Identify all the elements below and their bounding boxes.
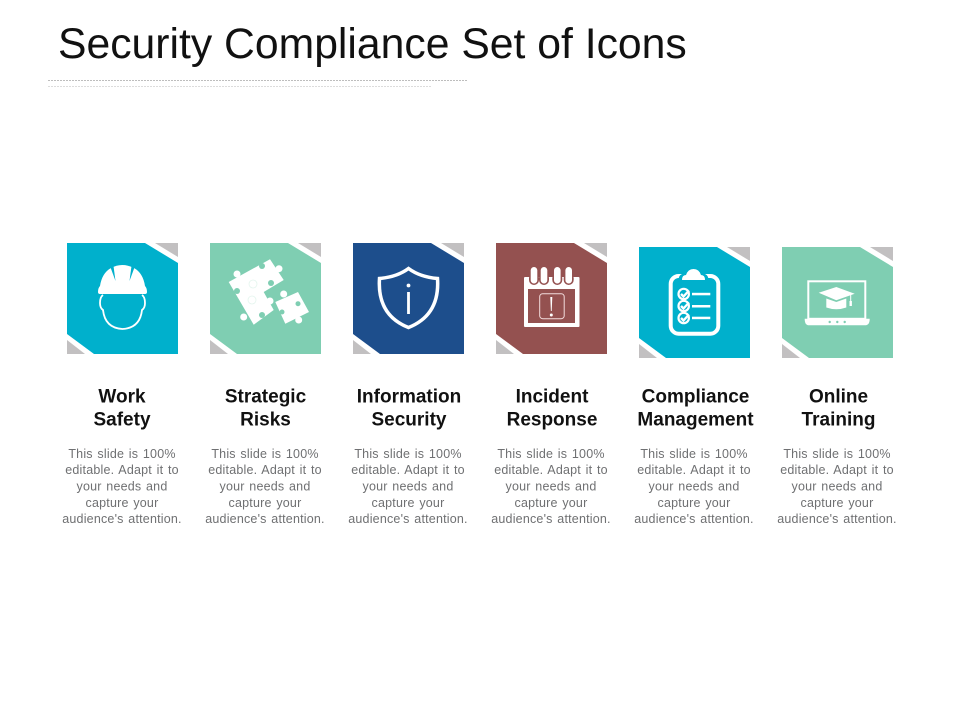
description: audience's attention.	[62, 512, 182, 526]
description: capture your	[229, 496, 301, 510]
panel: online training	[777, 247, 897, 526]
description: This slide is 100%	[640, 447, 748, 461]
description: editable. Adapt it to	[208, 463, 322, 477]
description: editable. Adapt it to	[780, 463, 894, 477]
description: capture your	[372, 496, 444, 510]
description: This slide is 100%	[497, 447, 605, 461]
description: editable. Adapt it to	[494, 463, 608, 477]
heading: Training	[802, 410, 875, 430]
description: editable. Adapt it to	[65, 463, 179, 477]
icon: clipboard checklist	[639, 247, 750, 358]
heading: Information	[357, 386, 461, 408]
description: audience's attention.	[348, 512, 468, 526]
icon: laptop with graduation cap	[782, 247, 893, 358]
description: audience's attention.	[634, 512, 754, 526]
description: capture your	[86, 496, 158, 510]
heading: Risks	[240, 410, 291, 430]
description: editable. Adapt it to	[351, 463, 465, 477]
description: capture your	[801, 496, 873, 510]
title: Security Compliance Set of Icons	[58, 20, 687, 68]
icon: puzzle pieces	[210, 243, 321, 354]
panel: work safety	[62, 243, 182, 526]
description: capture your	[515, 496, 587, 510]
heading: Response	[507, 410, 597, 430]
panel: incident response	[491, 243, 611, 526]
heading: Security	[372, 410, 447, 430]
panel: strategic risks	[205, 243, 325, 526]
description: your needs and	[363, 480, 453, 494]
description: audience's attention.	[491, 512, 611, 526]
panel: compliance management	[634, 247, 754, 526]
icon: hard hat	[67, 243, 178, 354]
description: capture your	[658, 496, 730, 510]
description: your needs and	[792, 480, 882, 494]
description: editable. Adapt it to	[637, 463, 751, 477]
heading: Work	[98, 386, 146, 408]
heading: Online	[809, 386, 868, 408]
icon: calendar with alert	[496, 243, 607, 354]
heading: Safety	[93, 410, 151, 430]
heading: Compliance	[642, 386, 749, 408]
description: audience's attention.	[777, 512, 897, 526]
description: This slide is 100%	[211, 447, 319, 461]
icon: shield with i	[353, 243, 464, 354]
description: This slide is 100%	[783, 447, 891, 461]
panel: information security	[348, 243, 468, 526]
heading: Strategic	[225, 386, 306, 408]
description: your needs and	[649, 480, 739, 494]
description: your needs and	[77, 480, 167, 494]
description: This slide is 100%	[354, 447, 462, 461]
description: your needs and	[506, 480, 596, 494]
description: This slide is 100%	[68, 447, 176, 461]
heading: Incident	[516, 386, 588, 408]
heading: Management	[637, 410, 754, 430]
description: audience's attention.	[205, 512, 325, 526]
description: your needs and	[220, 480, 310, 494]
